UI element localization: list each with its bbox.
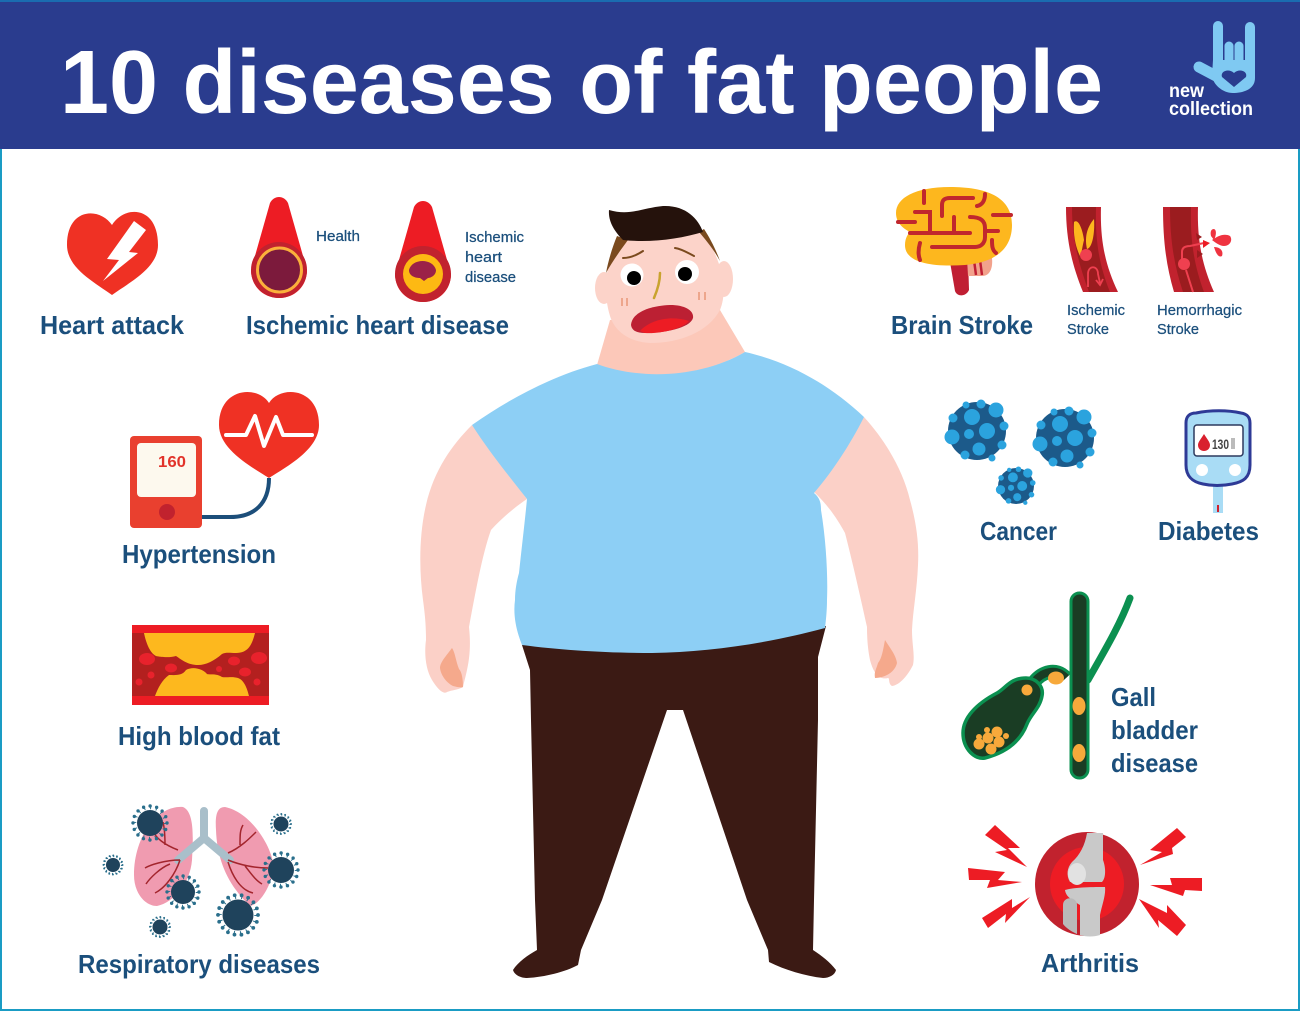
icon: virus particles bbox=[104, 806, 298, 937]
central figure: overweight man bbox=[420, 206, 918, 978]
icon: glucose meter: 130 bbox=[1212, 436, 1229, 452]
title: 10 diseases of fat people bbox=[60, 33, 1103, 133]
panel: gall bladder disease bbox=[963, 593, 1198, 778]
panel: high blood fat: High blood fat bbox=[118, 721, 280, 751]
icon: pain bolts bbox=[968, 825, 1202, 936]
panel: ischemic heart disease: Ischemic heart disease bbox=[246, 310, 509, 340]
ischemic label: Ischemic bbox=[465, 229, 524, 246]
ischemic stroke label: Ischemic bbox=[1067, 302, 1125, 319]
panel: respiratory diseases: Respiratory diseases bbox=[78, 949, 320, 979]
header band bbox=[0, 0, 1300, 149]
panel: respiratory diseases bbox=[78, 806, 320, 979]
ischemic stroke label: Stroke bbox=[1067, 321, 1109, 338]
ischemic stroke label bbox=[1067, 302, 1125, 338]
icon: hemorrhagic stroke artery bbox=[1163, 207, 1231, 292]
ischemic label: disease bbox=[465, 269, 516, 286]
hemorrhagic stroke label: Hemorrhagic bbox=[1157, 302, 1242, 319]
ears bbox=[595, 272, 613, 304]
right arm bbox=[814, 417, 918, 686]
ischemic label: heart bbox=[465, 249, 503, 266]
icon: gall bladder bbox=[963, 593, 1130, 778]
eyebrows bbox=[623, 248, 694, 258]
icon: blood pressure monitor: 160 bbox=[158, 454, 186, 471]
icon: lungs bbox=[134, 807, 274, 906]
sideburns bbox=[606, 229, 720, 273]
hair bbox=[609, 206, 703, 241]
panel: ischemic heart disease bbox=[246, 197, 524, 340]
panel: arthritis: Arthritis bbox=[1041, 948, 1139, 978]
panel: hypertension bbox=[122, 392, 319, 569]
icon: brain bbox=[896, 187, 1012, 295]
icon: healthy artery bbox=[251, 197, 307, 298]
right thumb bbox=[875, 640, 897, 678]
hemorrhagic stroke label bbox=[1157, 302, 1242, 338]
icon: heart with lightning bolt bbox=[67, 212, 158, 295]
ischemic label bbox=[465, 229, 524, 286]
face bbox=[606, 229, 724, 343]
icon: blood pressure monitor bbox=[130, 436, 269, 528]
panel: hypertension: Hypertension bbox=[122, 539, 276, 569]
panel: high blood fat bbox=[118, 625, 280, 751]
icon: new collection hand logo: collection bbox=[1169, 99, 1253, 120]
icon: clogged artery bbox=[132, 625, 269, 705]
pants bbox=[513, 626, 836, 978]
icon: new collection hand logo: new bbox=[1169, 81, 1204, 102]
mouth bbox=[631, 305, 693, 333]
panel: cancer bbox=[944, 400, 1096, 546]
neck bbox=[597, 310, 745, 375]
icon: ischemic artery bbox=[395, 201, 451, 302]
panel: diabetes bbox=[1158, 411, 1259, 546]
gall bladder label: disease bbox=[1111, 748, 1198, 778]
panel: brain stroke bbox=[891, 187, 1242, 340]
panel: heart attack: Heart attack bbox=[40, 310, 185, 340]
icon: ischemic stroke artery bbox=[1066, 207, 1118, 292]
nose bbox=[654, 273, 660, 298]
panel: brain stroke: Brain Stroke bbox=[891, 310, 1033, 340]
hemorrhagic stroke label: Stroke bbox=[1157, 321, 1199, 338]
cheek marks bbox=[622, 292, 705, 306]
left thumb bbox=[440, 648, 463, 687]
t-shirt bbox=[472, 352, 864, 653]
panel: arthritis bbox=[968, 825, 1202, 978]
panel: heart attack bbox=[40, 212, 185, 340]
panel: ischemic heart disease: Health bbox=[316, 228, 360, 245]
left arm bbox=[420, 425, 527, 693]
panel: cancer: Cancer bbox=[980, 516, 1057, 546]
head bbox=[595, 206, 733, 343]
icon: new collection hand logo bbox=[1169, 26, 1255, 120]
icon: cancer cells bbox=[944, 400, 1096, 505]
gall bladder label: Gall bbox=[1111, 682, 1156, 712]
gall bladder label: bladder bbox=[1111, 715, 1198, 745]
gall bladder label bbox=[1111, 682, 1198, 778]
eyes bbox=[620, 264, 644, 286]
panel: diabetes: Diabetes bbox=[1158, 516, 1259, 546]
icon: knee joint bbox=[1035, 832, 1139, 936]
icon: heart with pulse bbox=[219, 392, 319, 478]
